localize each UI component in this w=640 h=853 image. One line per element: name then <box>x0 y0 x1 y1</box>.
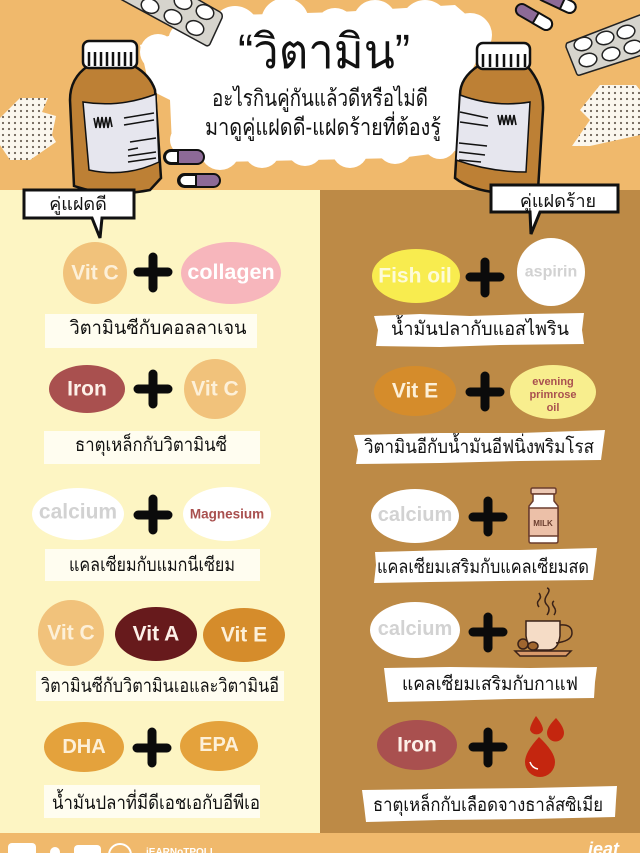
subtitle: มาดูคู่แฝดดี-แฝดร้ายที่ต้องรู้ <box>205 111 441 141</box>
row: Vit E + evening primrose oil: evening <box>532 376 574 388</box>
row: Iron + Vit C <box>44 359 260 464</box>
row: Iron + blood: ธาตุเหล็กกับเลือดจางธาลัสซิเมีย <box>373 792 603 817</box>
row: calcium + milk: calcium <box>378 504 452 526</box>
icon: bottle left <box>70 41 161 193</box>
cloud behind title <box>140 0 492 170</box>
row: DHA + EPA: น้ำมันปลาที่มีดีเอชเอกับอีพีเอ <box>52 789 260 814</box>
row: Vit E + evening primrose oil: Vit E <box>392 380 438 402</box>
row: Fish oil + aspirin <box>372 238 585 347</box>
row: Iron + blood: Iron <box>397 734 437 756</box>
row: Vit C Vit A Vit E: Vit A <box>133 622 179 646</box>
row: DHA + EPA <box>44 721 260 818</box>
row: Vit E + evening primrose oil: วิตามินอีกับน้ำมันอีฟนิ่งพริมโรส <box>364 433 594 458</box>
icon: capsules right <box>514 0 578 32</box>
row: calcium + coffee: แคลเซียมเสริมกับกาแฟ <box>402 673 578 695</box>
icon: blister pack left <box>113 0 222 46</box>
row: Iron + blood <box>362 716 617 822</box>
row: Vit E + evening primrose oil <box>354 365 605 464</box>
callout: good pairs <box>24 190 134 238</box>
row: Vit E + evening primrose oil: oil <box>547 402 559 414</box>
footer bar <box>0 833 640 853</box>
row: Vit C Vit A Vit E: Vit E <box>221 624 267 646</box>
header background <box>0 0 640 190</box>
row: Iron + Vit C: Iron <box>67 378 107 400</box>
icon: milk bottle: MILK <box>533 519 553 528</box>
row: Vit C Vit A Vit E: Vit C <box>47 622 95 644</box>
title: “วิตามิน” <box>238 26 410 79</box>
row: Vit C + collagen <box>45 242 281 348</box>
row: DHA + EPA: DHA <box>62 736 106 758</box>
icon: halftone left <box>0 98 56 160</box>
icon: milk bottle <box>529 488 558 543</box>
row: calcium + Magnesium: calcium <box>39 500 117 524</box>
row: calcium + milk <box>371 488 597 583</box>
row: Vit C + collagen: วิตามินซีกับคอลลาเจน <box>69 317 247 339</box>
icon: coffee cup <box>515 588 572 656</box>
icon: blister pack right <box>566 13 640 75</box>
left panel: good pairs <box>0 190 320 833</box>
row: Fish oil + aspirin: Fish oil <box>378 264 452 288</box>
row: Iron + Vit C: ธาตุเหล็กกับวิตามินซี <box>75 432 227 457</box>
callout: bad pairs <box>491 185 618 234</box>
row: calcium + Magnesium: แคลเซียมกับแมกนีเซียม <box>69 554 235 576</box>
subtitle: อะไรกินคู่กันแล้วดีหรือไม่ดี <box>212 85 428 112</box>
subtitle <box>205 85 441 141</box>
row: Vit C Vit A Vit E <box>36 600 285 701</box>
row: Vit E + evening primrose oil: primrose <box>529 389 577 401</box>
icon: blood drops <box>525 716 564 777</box>
row: calcium + coffee <box>370 588 597 702</box>
row: calcium + Magnesium <box>32 487 271 581</box>
row: Iron + Vit C: Vit C <box>191 378 239 400</box>
icon: halftone right <box>572 85 640 146</box>
row: Vit C + collagen: collagen <box>187 260 275 284</box>
row: calcium + milk: แคลเซียมเสริมกับแคลเซียมสด <box>377 556 589 578</box>
icon: capsules left <box>164 150 220 187</box>
row: Fish oil + aspirin: aspirin <box>525 264 577 280</box>
row: Vit C + collagen: Vit C <box>71 262 119 284</box>
callout: good pairs: คู่แฝดดี <box>49 194 107 215</box>
row: calcium + coffee: calcium <box>378 618 452 640</box>
callout: bad pairs: คู่แฝดร้าย <box>520 191 596 212</box>
row: Vit C Vit A Vit E: วิตามินซีกับวิตามินเอและวิตามินอี <box>41 675 279 697</box>
right panel: bad pairs <box>320 190 640 833</box>
icon: bottle right <box>455 43 543 193</box>
row: Fish oil + aspirin: น้ำมันปลากับแอสไพริน <box>391 315 569 340</box>
row: calcium + Magnesium: Magnesium <box>190 506 264 522</box>
row: DHA + EPA: EPA <box>199 734 239 756</box>
